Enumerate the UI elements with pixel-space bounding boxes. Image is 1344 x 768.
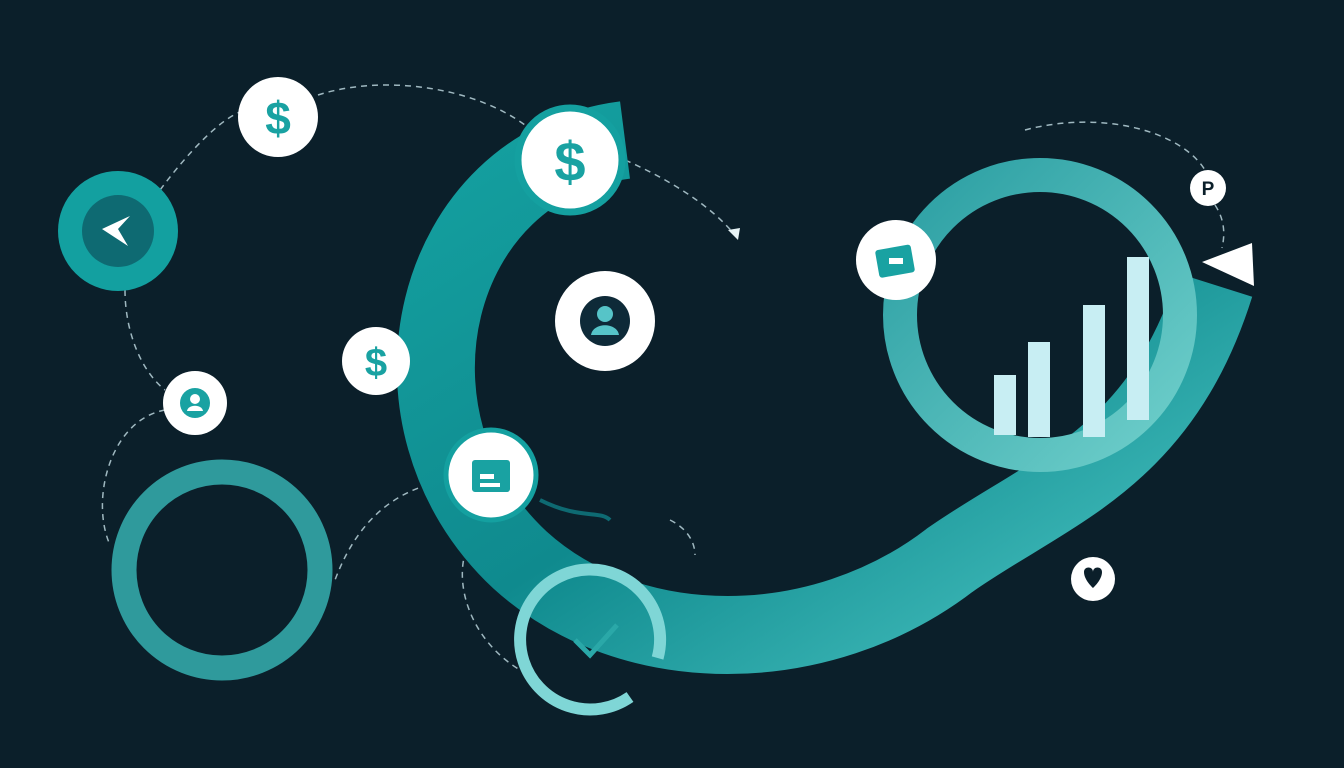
arrowhead: dashed arc: [728, 228, 740, 240]
icon: dollar 2: $: [554, 130, 586, 193]
bar chart: [994, 257, 1149, 437]
swoosh: [436, 140, 1215, 635]
icon: dollar 3: [342, 327, 410, 395]
icon: dollar 2: [518, 108, 622, 212]
icon: heart pin: [1071, 557, 1115, 601]
icon: dollar 1: $: [265, 92, 291, 144]
icon: compass circle: [58, 171, 178, 291]
icon: person small: [163, 371, 227, 435]
dashed connectors: [102, 85, 1224, 670]
icon: briefcase: [446, 430, 536, 520]
icon: P: [1190, 170, 1226, 206]
icon: lock/bag: [856, 220, 936, 300]
icon: person center: [555, 271, 655, 371]
big ring left: [124, 472, 320, 668]
arrowhead: swoosh: [1202, 243, 1254, 286]
icon: dollar 1: [238, 77, 318, 157]
icon: dollar 3: $: [365, 341, 387, 385]
icon: P: P: [1202, 179, 1215, 200]
check arc: [520, 569, 660, 709]
right ring: [900, 175, 1180, 455]
